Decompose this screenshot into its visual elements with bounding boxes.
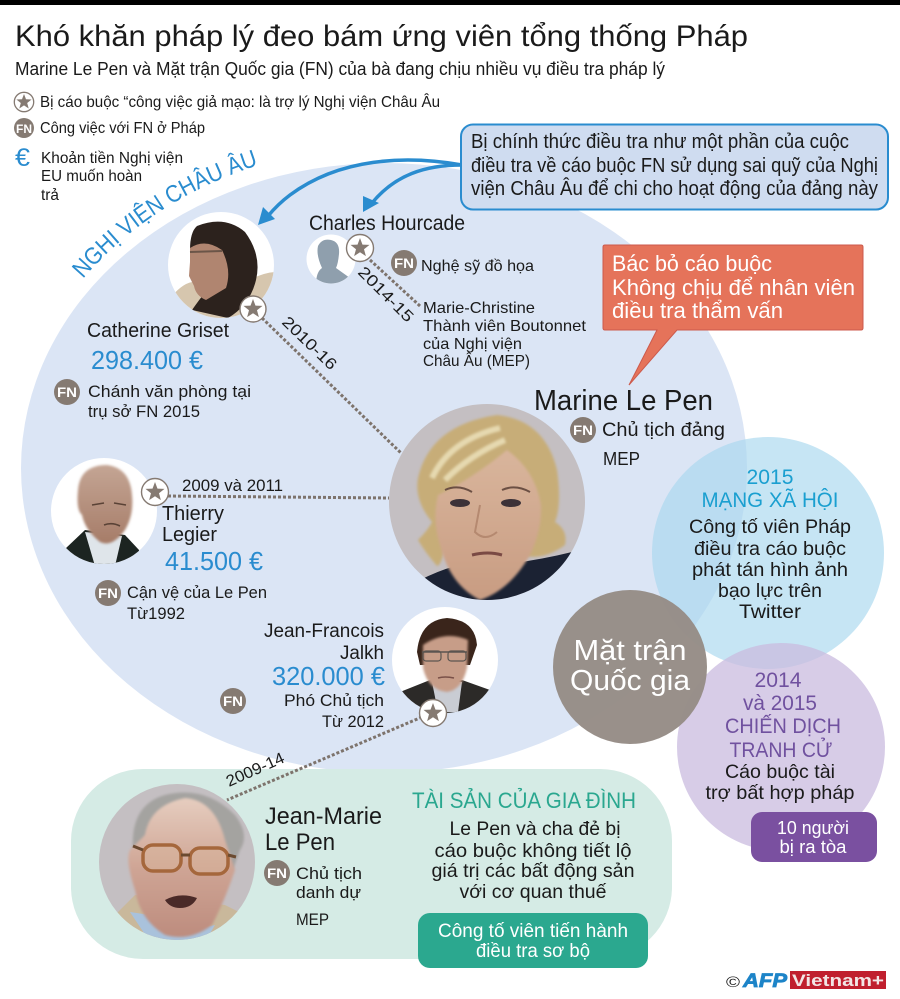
FN badge: Legier: FN	[98, 585, 118, 601]
text: family assets: với cơ quan thuế	[460, 881, 607, 903]
portrait: Jean-Marie Le Pen	[99, 784, 255, 945]
panel: European Parliament ellipse	[21, 163, 747, 773]
FN badge: Marine: FN	[573, 422, 593, 438]
arrow: to Hourcade	[363, 165, 462, 212]
badge: 10 defendants	[751, 812, 877, 862]
block: Jean-Francois Jalkh	[220, 621, 386, 731]
label: Jean-Marie Le Pen: Le Pen	[265, 829, 335, 856]
portrait: Charles Hourcade silhouette	[306, 234, 374, 290]
text: Marie-Christine Boutonnet: Châu Âu (MEP)	[423, 351, 530, 370]
star badge: Griset	[240, 296, 266, 322]
social media text: bạo lực trên	[718, 580, 822, 602]
social media text: điều tra cáo buộc	[694, 538, 846, 560]
role: Jean-Marie: danh dự	[296, 883, 361, 902]
social media text: phát tán hình ảnh	[692, 559, 848, 581]
callout: denies allegations: điều tra thẩm vấn	[612, 298, 783, 323]
credit: AFP Vietnam+: AFP	[742, 971, 787, 992]
dotted connector: Hourcade	[370, 260, 420, 306]
text: MEP: MEP	[603, 449, 640, 469]
amount: Legier: 41.500 €	[165, 546, 264, 576]
star badge: Jalkh	[420, 700, 446, 726]
arrow: to Griset	[258, 160, 462, 225]
dotted connector: Legier	[168, 496, 389, 498]
badge: preliminary investigation: điều tra sơ bộ	[476, 941, 590, 962]
campaign text: trợ bất hợp pháp	[706, 782, 855, 804]
callout: formal investigation: viện Châu Âu để chi cho hoạt động của đảng này	[471, 177, 878, 200]
years: 2010-16: 2010-16	[278, 314, 340, 374]
text: Marie-Christine Boutonnet	[423, 300, 587, 370]
callout: denies allegations: Không chịu để nhân viên	[612, 275, 855, 300]
role: Jean-Marie: Chủ tịch	[296, 864, 362, 883]
campaign text: TRANH CỬ	[730, 738, 833, 762]
credit: AFP Vietnam+	[726, 971, 886, 992]
role: Jalkh: Từ 2012	[322, 712, 384, 731]
icon: euro: €	[15, 144, 30, 172]
portrait: Catherine Griset	[168, 212, 276, 322]
dotted connector: Griset	[262, 318, 401, 453]
credit: AFP Vietnam+: Vietnam+	[792, 971, 884, 990]
FN badge: Hourcade	[391, 250, 417, 276]
role: Jalkh	[284, 691, 384, 731]
role: Griset: Chánh văn phòng tại	[88, 382, 251, 401]
role: Griset: trụ sở FN 2015	[88, 402, 200, 421]
amount: Jalkh: 320.000 €	[272, 661, 386, 691]
text: family assets: Le Pen và cha đẻ bị	[450, 818, 620, 840]
role: Jean-Marie	[296, 864, 362, 929]
social media text: MẠNG XÃ HỘI	[702, 488, 838, 512]
dotted connector: Jalkh to Jean-Marie	[227, 717, 422, 800]
FN badge: Griset	[54, 379, 80, 405]
role: Legier: Từ1992	[127, 604, 185, 623]
block: Thierry Legier: Legier	[162, 524, 217, 546]
FN badge: Jean-Marie: FN	[267, 865, 287, 881]
star badge: Hourcade	[346, 234, 374, 262]
title: Khó khăn pháp lý đeo bám ứng viên tổng thống Pháp	[15, 20, 748, 53]
block: Catherine Griset: Catherine Griset	[87, 320, 229, 342]
star badge: Legier	[142, 478, 168, 506]
circle: campaign 2014-2015	[677, 643, 885, 851]
icon: FN badge legend	[14, 118, 34, 138]
social media text: Twitter	[739, 601, 802, 623]
badge: 10 defendants: 10 người	[777, 818, 849, 838]
legend text: star: Bị cáo buộc “công việc giả mạo: là trợ lý Nghị viện Châu Âu	[40, 92, 440, 111]
legend text: euro: trả	[41, 187, 59, 204]
amount: Griset: 298.400 €	[91, 345, 204, 375]
text: family assets	[432, 818, 634, 903]
credit: AFP Vietnam+: ©	[726, 974, 740, 991]
years: 2014-15: 2014-15	[354, 264, 416, 326]
portrait: Thierry Legier	[51, 458, 168, 570]
block: Catherine Griset	[54, 320, 251, 421]
badge: 10 defendants: bị ra tòa	[780, 837, 848, 857]
role: Jalkh: Phó Chủ tịch	[284, 691, 384, 710]
text: party president: Chủ tịch đảng	[602, 420, 725, 441]
text: Marie-Christine Boutonnet: của Nghị viện	[423, 336, 522, 353]
legend text: euro	[41, 150, 183, 204]
block: Jean-Francois Jalkh: Jean-Francois	[264, 621, 384, 642]
top black bar	[0, 0, 900, 5]
icon: star badge legend	[14, 92, 34, 112]
FN badge: Griset: FN	[57, 384, 77, 400]
FN badge: Jalkh: FN	[223, 693, 243, 709]
label: Charles Hourcade: Charles Hourcade	[309, 212, 465, 235]
portrait: Jean-Francois Jalkh	[392, 607, 498, 726]
label: Jean-Marie Le Pen: Jean-Marie	[265, 803, 382, 830]
callout: denies allegations	[603, 245, 863, 385]
FN badge: Marine	[570, 417, 596, 443]
legend	[14, 92, 440, 204]
circle: social media 2015	[652, 437, 884, 669]
badge: preliminary investigation: Công tố viên tiến hành	[438, 921, 628, 942]
icon: FN badge legend: FN	[16, 122, 32, 136]
text: Marie-Christine Boutonnet: Marie-Christine	[423, 300, 535, 317]
campaign text: và 2015	[743, 692, 817, 715]
label: Jean-Marie Le Pen	[265, 803, 382, 856]
National Front label: Mặt trận	[574, 635, 686, 667]
social media text	[689, 466, 851, 623]
FN badge: Jean-Marie	[264, 860, 290, 886]
callout: formal investigation	[461, 124, 888, 210]
role: Griset	[88, 382, 251, 421]
role: Legier: Cận vệ của Le Pen	[127, 583, 267, 602]
circle: National Front	[553, 590, 707, 744]
campaign text: Cáo buộc tài	[725, 761, 835, 783]
role: Legier	[127, 583, 267, 623]
FN badge: Legier	[95, 580, 121, 606]
legend text: euro: EU muốn hoàn	[41, 168, 142, 185]
text: graphic artist: Nghệ sỹ đồ họa	[421, 258, 534, 275]
panel: family assets	[71, 769, 672, 959]
subtitle: Marine Le Pen và Mặt trận Quốc gia (FN) của bà đang chịu nhiều vụ điều tra pháp lý	[15, 59, 665, 79]
campaign text: CHIẾN DỊCH	[725, 715, 841, 738]
years: 2009-14: 2009-14	[224, 750, 287, 791]
block: Thierry Legier: Thierry	[162, 503, 224, 525]
text: family assets: giá trị các bất động sản	[432, 860, 634, 882]
callout: formal investigation: Bị chính thức điều tra như một phần của cuộc	[471, 131, 849, 153]
heading: family assets: TÀI SẢN CỦA GIA ĐÌNH	[412, 788, 636, 813]
block: Thierry Legier	[95, 503, 267, 623]
National Front label	[570, 635, 691, 697]
role: Jean-Marie: MEP	[296, 910, 329, 929]
text: Marie-Christine Boutonnet: Thành viên Boutonnet	[423, 318, 587, 335]
years: 2009 and 2011: 2009 và 2011	[182, 476, 283, 495]
label: Marine Le Pen: Marine Le Pen	[534, 385, 713, 417]
legend text: FN: Công việc với FN ở Pháp	[40, 120, 205, 137]
callout: denies allegations: Bác bỏ cáo buộc	[612, 251, 772, 276]
campaign text: 2014	[754, 669, 802, 692]
FN badge: Jalkh	[220, 688, 246, 714]
text: family assets: cáo buộc không tiết lộ	[434, 840, 632, 862]
curved heading: European Parliament: NGHỊ VIỆN CHÂU ÂU	[72, 150, 256, 278]
social media text: Công tố viên Pháp	[689, 516, 851, 538]
social media text: 2015	[746, 466, 794, 489]
legend text: euro: Khoản tiền Nghị viện	[41, 150, 183, 167]
National Front label: Quốc gia	[570, 665, 691, 697]
FN badge: Hourcade: FN	[394, 255, 414, 271]
block: Jean-Francois Jalkh: Jalkh	[340, 643, 384, 664]
badge: preliminary investigation	[418, 913, 648, 968]
portrait: Marine Le Pen	[389, 404, 590, 610]
campaign text	[706, 669, 855, 804]
